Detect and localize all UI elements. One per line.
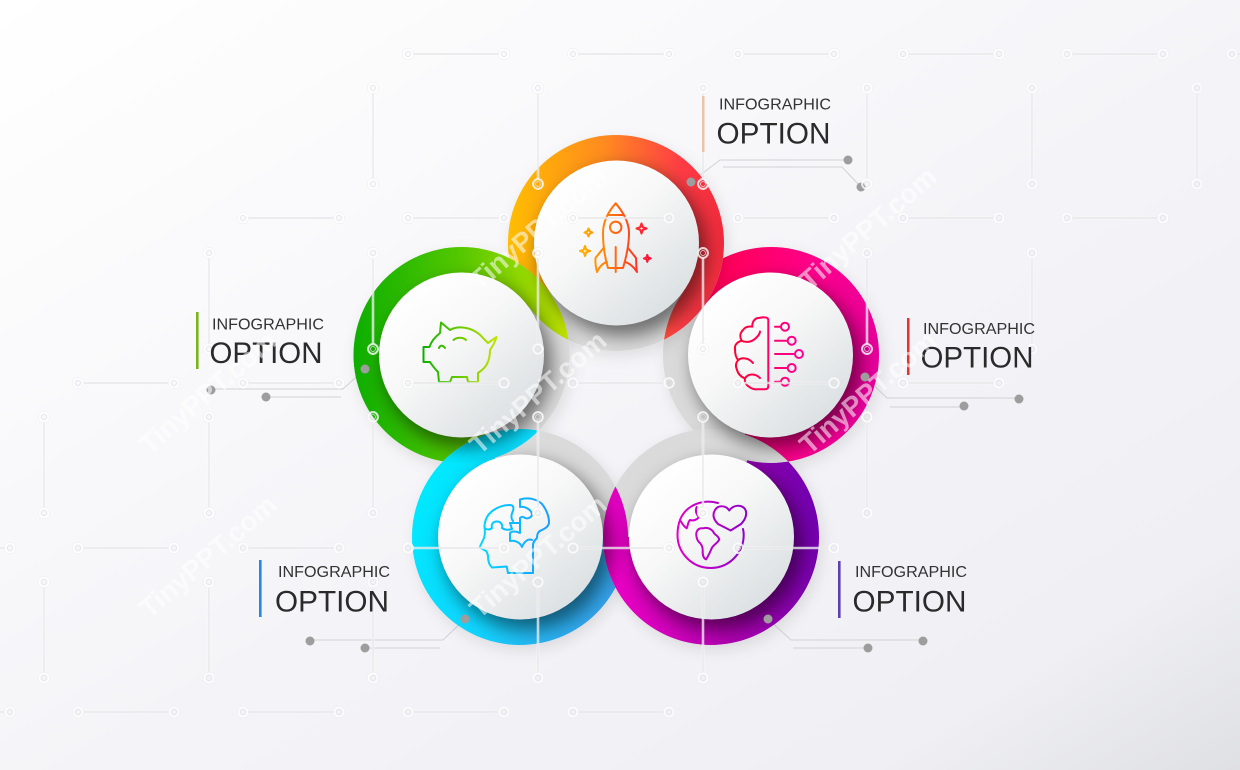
label: right option: OPTION [920,342,1034,374]
label: bottom left option: OPTION [275,586,389,618]
icon: brain with circuit [735,317,803,389]
label: left option [196,312,324,370]
ring: top orange red [508,135,724,351]
watermarks: TinyPPT.com [463,161,612,296]
connectors: left option [206,369,365,402]
watermarks [133,161,942,624]
label: bottom right option [838,561,967,618]
ring: right pink [663,247,879,463]
label: bottom left option: INFOGRAPHIC [278,564,390,581]
label: bottom right option: INFOGRAPHIC [855,564,967,581]
label: top option: OPTION [716,118,830,150]
watermarks: TinyPPT.com [133,325,282,460]
connectors: top option [691,156,866,192]
ring: bottom right magenta [603,429,819,645]
icon: rocket [580,203,651,272]
label: bottom left option [259,560,390,618]
ring: bottom left cyan [412,429,628,645]
icon: piggy bank [424,322,496,382]
label: bottom right option: OPTION [852,586,966,618]
disc: top [534,160,707,336]
connector anchor dots on rings [360,178,870,624]
connectors: bottom right option [768,619,928,652]
icon: puzzle head [480,498,549,573]
label: top option [702,96,831,152]
disc: bottom right [629,454,802,630]
connectors: right option [865,377,1024,410]
disc: left [379,272,552,448]
label: right option: INFOGRAPHIC [923,321,1035,338]
label: left option: OPTION [210,337,322,370]
label: top option: INFOGRAPHIC [719,96,831,114]
watermarks: TinyPPT.com [463,325,612,460]
label: right option [907,318,1035,375]
watermarks: TinyPPT.com [793,325,942,460]
icon: globe with heart [678,502,746,568]
watermarks: TinyPPT.com [133,489,282,624]
disc: bottom left [438,454,611,630]
ring: left green [354,247,570,463]
disc: right [688,272,861,448]
label: left option: INFOGRAPHIC [212,316,324,334]
watermarks: TinyPPT.com [463,489,612,624]
watermarks: TinyPPT.com [793,161,942,296]
connectors: bottom left option [306,619,465,652]
